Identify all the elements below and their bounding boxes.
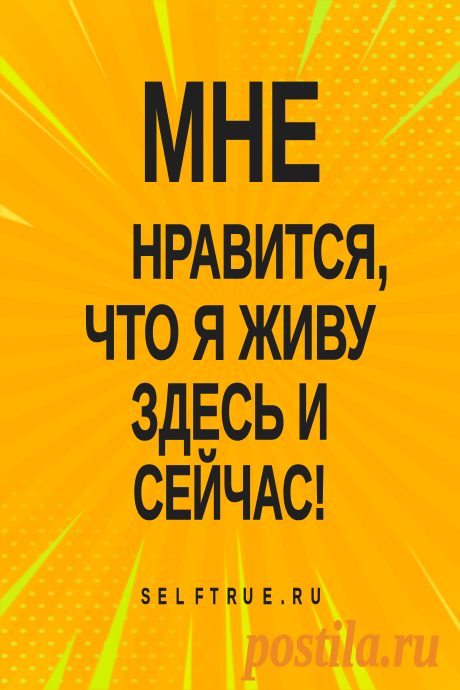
- site name: SELFTRUE.RU: [141, 585, 321, 610]
- halftone dots: bottom left: [2, 492, 202, 684]
- halftone dots: top right: [220, 4, 460, 233]
- headline: МНЕ: МНЕ: [140, 53, 322, 212]
- bright rays: lower half: [0, 505, 460, 690]
- bright rays: upper half: [0, 0, 460, 228]
